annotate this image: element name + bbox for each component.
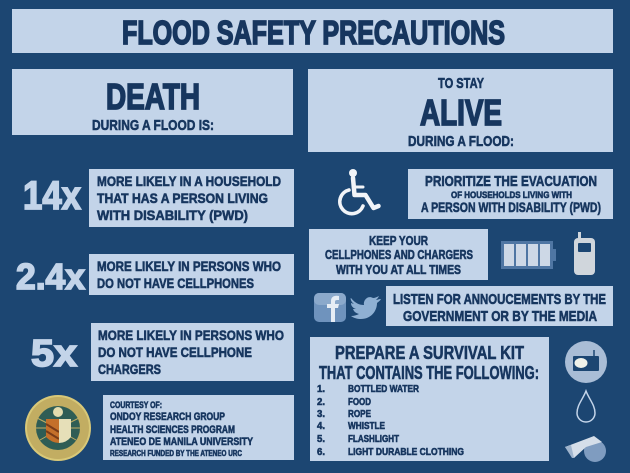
icon: battery (501, 241, 556, 269)
icon: facebook (314, 293, 346, 322)
survival kit list: FLASHLIGHT (348, 433, 399, 445)
survival kit list: 1. (317, 383, 325, 395)
panel: courtesy credits: RESEARCH FUNDED BY THE ATENEO URC (110, 449, 242, 458)
title (12, 9, 613, 53)
icon: university seal (25, 395, 91, 461)
panel: no chargers risk (91, 323, 294, 381)
panel: no cellphones risk: MORE LIKELY IN PERSONS WHO (97, 258, 281, 274)
icon: wheelchair (340, 169, 378, 214)
icon: whistle (565, 436, 606, 462)
panel: courtesy credits: ONDOY RESEARCH GROUP (110, 411, 225, 423)
panel: keep cellphones (309, 229, 488, 280)
icon: water drop (577, 391, 595, 422)
panel: keep cellphones: KEEP YOUR (369, 233, 428, 248)
panel: alive heading: DURING A FLOOD: (408, 133, 514, 150)
panel: death heading: DURING A FLOOD IS: (92, 117, 214, 134)
panel: no cellphones risk (89, 254, 294, 295)
panel: keep cellphones: WITH YOU AT ALL TIMES (336, 262, 461, 277)
survival kit list: 2. (317, 396, 325, 408)
panel: survival kit: PREPARE A SURVIVAL KIT (335, 343, 524, 363)
survival kit list (317, 383, 464, 458)
survival kit list: 5. (317, 433, 325, 445)
panel: prioritize evacuation: OF HOUSEHOLDS LIVING WITH (451, 190, 572, 200)
panel: alive heading: ALIVE (420, 92, 502, 133)
panel: death heading (12, 69, 293, 135)
survival kit list: 3. (317, 408, 325, 420)
survival kit list: 6. (317, 446, 325, 458)
icon: radio (565, 341, 607, 383)
panel: household disability risk: MORE LIKELY IN A HOUSEHOLD (97, 173, 281, 189)
survival kit list: LIGHT DURABLE CLOTHING (348, 446, 464, 458)
panel: courtesy credits: COURTESY OF: (110, 400, 162, 410)
icon: cellphone (574, 232, 595, 275)
icon: twitter (351, 296, 381, 319)
panel: no chargers risk: MORE LIKELY IN PERSONS WHO (98, 327, 284, 343)
panel: no cellphones risk: DO NOT HAVE CELLPHONES (97, 275, 254, 291)
stat: 2.4x: 2.4x (16, 256, 85, 297)
panel: no chargers risk: CHARGERS (98, 361, 161, 377)
panel: household disability risk (89, 169, 294, 227)
panel: courtesy credits: ATENEO DE MANILA UNIVERSITY (110, 436, 254, 448)
panel: alive heading: TO STAY (438, 75, 484, 92)
title: FLOOD SAFETY PRECAUTIONS (122, 14, 505, 51)
survival kit list: WHISTLE (348, 420, 385, 432)
survival kit list: ROPE (348, 408, 371, 420)
panel: alive heading (308, 69, 613, 152)
panel: prioritize evacuation (408, 169, 613, 219)
panel: death heading: DEATH (106, 76, 200, 117)
panel: courtesy credits: HEALTH SCIENCES PROGRAM (110, 424, 235, 436)
stat: 5x: 5x (31, 333, 77, 375)
stat: 14x: 14x (23, 174, 81, 218)
panel: household disability risk: WITH DISABILITY (PWD) (97, 207, 248, 223)
survival kit list: FOOD (348, 396, 371, 408)
survival kit list: 4. (317, 420, 325, 432)
panel: listen for announcements (386, 286, 613, 326)
panel: survival kit (310, 337, 549, 461)
panel: no chargers risk: DO NOT HAVE CELLPHONE (98, 344, 252, 360)
survival kit list: BOTTLED WATER (348, 383, 419, 395)
panel: household disability risk: THAT HAS A PERSON LIVING (97, 190, 268, 206)
panel: keep cellphones: CELLPHONES AND CHARGERS (325, 247, 473, 262)
panel: courtesy credits (103, 395, 294, 460)
panel: survival kit: THAT CONTAINS THE FOLLOWING: (319, 363, 539, 383)
